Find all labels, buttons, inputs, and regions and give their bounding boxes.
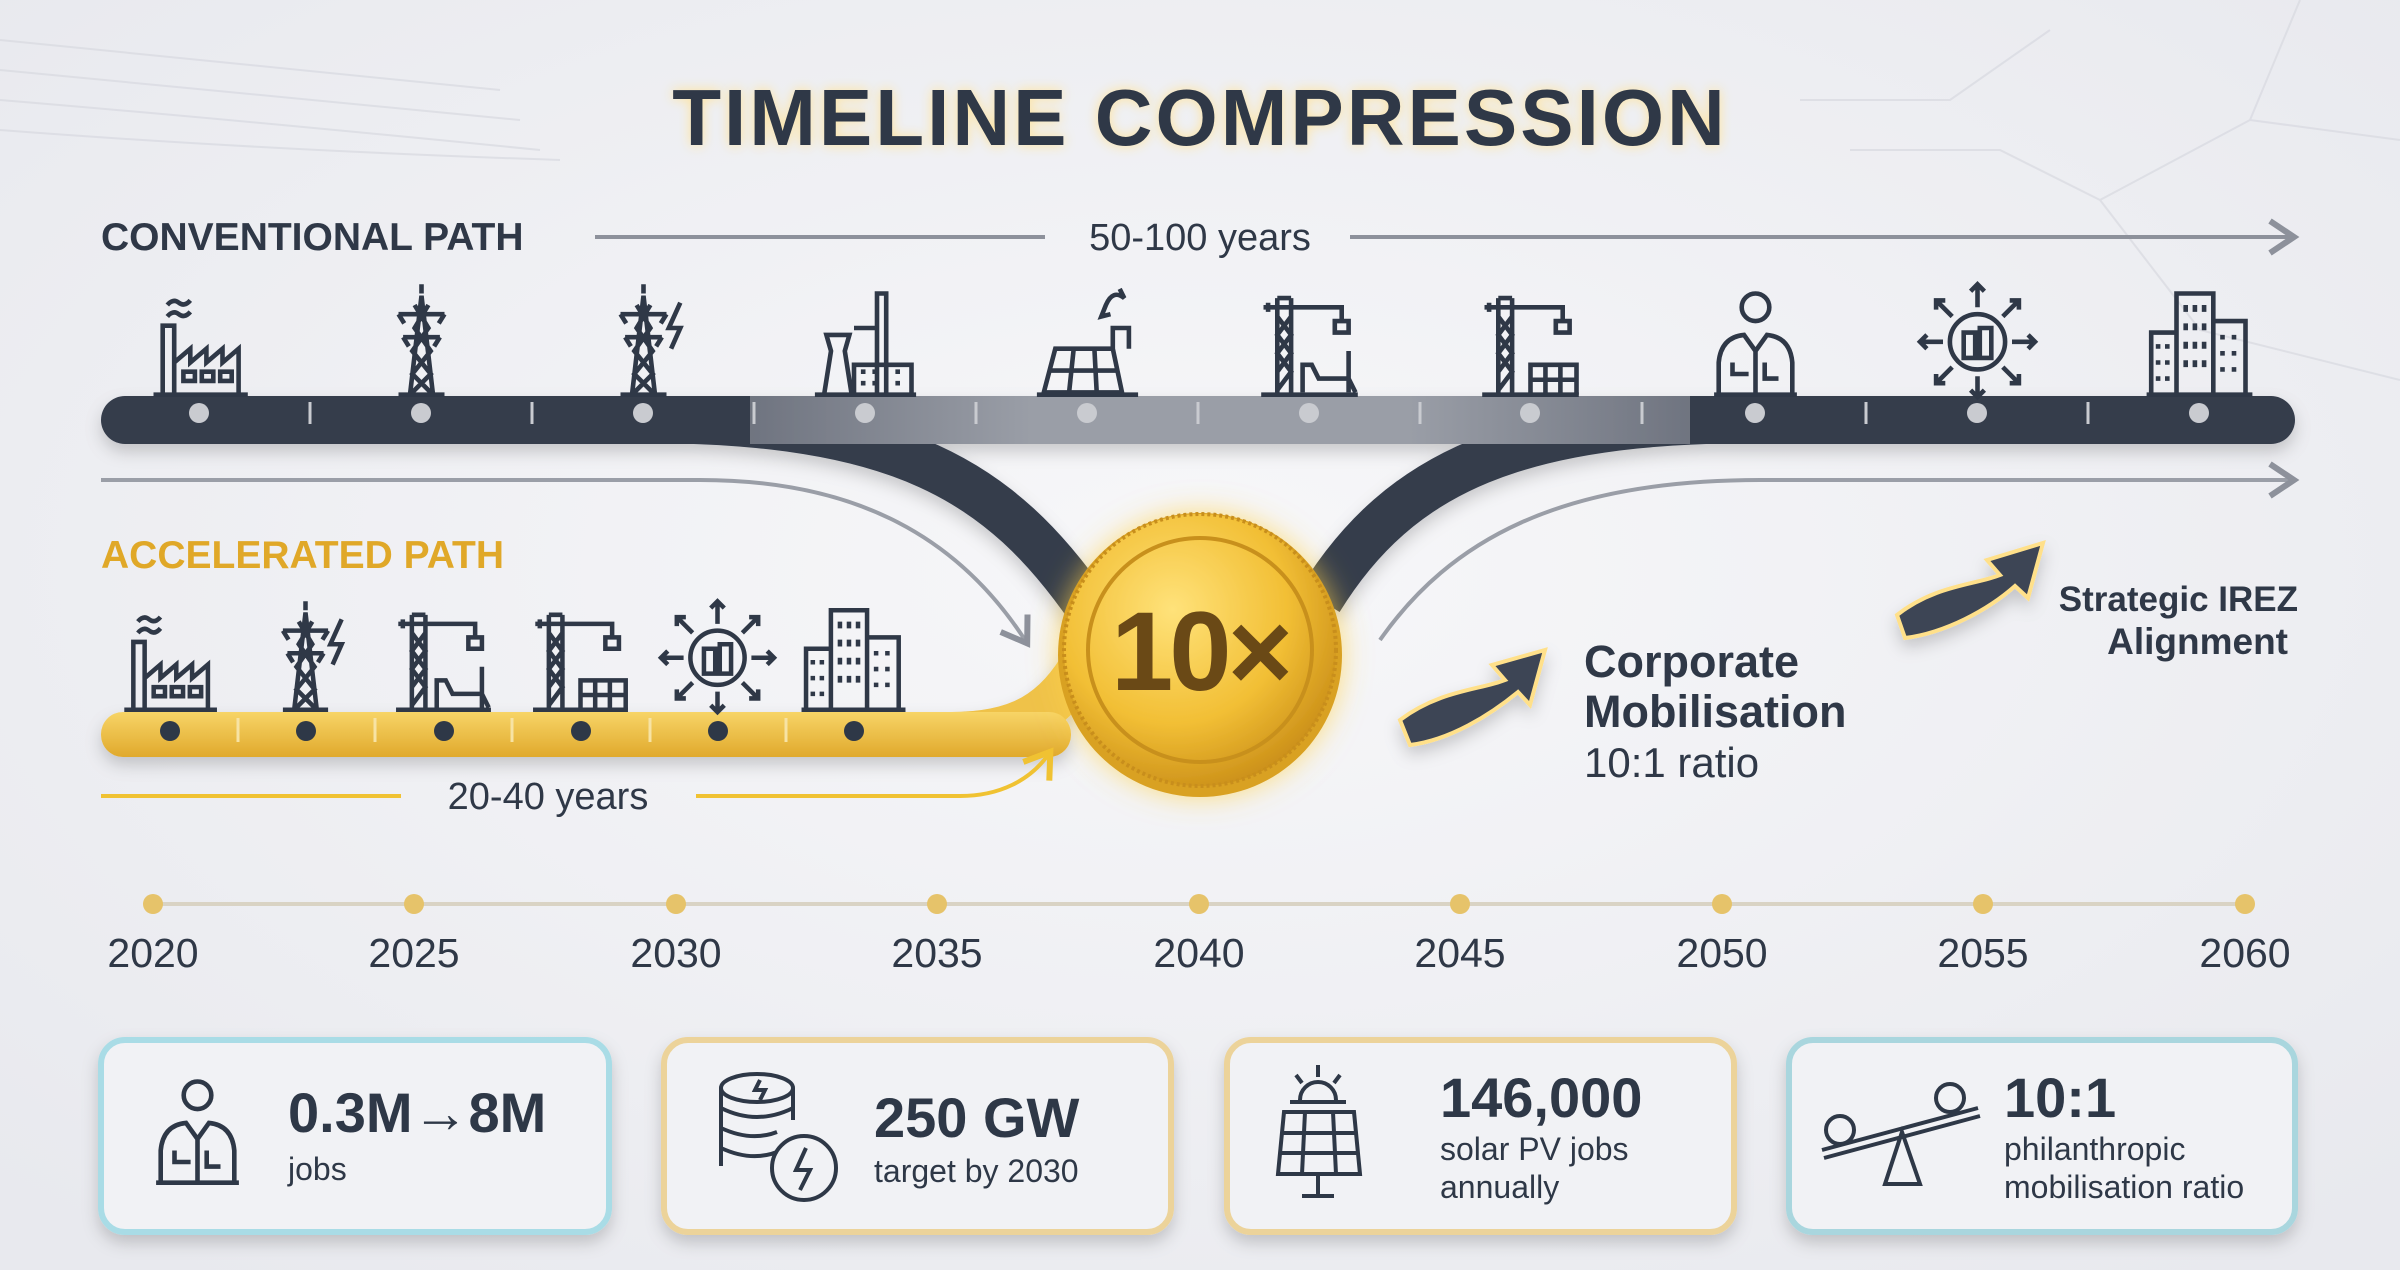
conventional icons <box>154 284 2252 397</box>
accelerated path label: ACCELERATED PATH <box>101 534 504 577</box>
callout: corporate mobilisation <box>1400 636 1846 786</box>
year axis: 2020 <box>107 930 199 976</box>
card: solar PV jobs: 146,000 <box>1440 1066 1642 1129</box>
year axis: 2030 <box>630 930 722 976</box>
coin 10x <box>1058 513 1342 797</box>
card: jobs: 0.3M→8M <box>288 1081 546 1144</box>
accelerated duration arrow: 20-40 years <box>448 776 648 818</box>
year axis: 2060 <box>2199 930 2291 976</box>
year axis: 2045 <box>1414 930 1506 976</box>
card: 10:1 ratio <box>1789 1040 2295 1232</box>
callout: corporate mobilisation: Corporate <box>1584 636 1799 687</box>
year axis: 2025 <box>368 930 460 976</box>
card: 10:1 ratio: philanthropic <box>2004 1131 2185 1167</box>
accelerated icons <box>124 601 905 712</box>
conventional path label: CONVENTIONAL PATH <box>101 216 524 259</box>
year axis <box>107 894 2291 976</box>
accelerated duration arrow <box>101 755 1048 818</box>
year axis: 2035 <box>891 930 983 976</box>
year axis: 2055 <box>1937 930 2029 976</box>
card: solar PV jobs: annually <box>1440 1169 1559 1205</box>
year axis: 2050 <box>1676 930 1768 976</box>
grey flow arrows <box>101 480 2290 640</box>
title: TIMELINE COMPRESSION <box>672 73 1728 162</box>
card: solar PV jobs: solar PV jobs <box>1440 1131 1629 1167</box>
conventional timeline bar <box>101 396 2295 610</box>
card: jobs <box>101 1040 609 1232</box>
callout: strategic IREZ alignment: Strategic IREZ <box>2059 580 2298 619</box>
card: solar PV jobs <box>1227 1040 1734 1232</box>
coin 10x: 10× <box>1111 589 1289 714</box>
year axis: 2040 <box>1153 930 1245 976</box>
callout: strategic IREZ alignment <box>1897 543 2298 662</box>
conventional duration arrow: 50-100 years <box>1089 217 1311 259</box>
card: 10:1 ratio: mobilisation ratio <box>2004 1169 2244 1205</box>
accelerated timeline bar <box>101 660 1085 757</box>
card: 250 GW: 250 GW <box>874 1086 1080 1149</box>
callout: corporate mobilisation: Mobilisation <box>1584 686 1846 737</box>
callout: strategic IREZ alignment: Alignment <box>2107 621 2288 662</box>
card: 250 GW <box>664 1040 1171 1232</box>
card: 10:1 ratio: 10:1 <box>2004 1066 2116 1129</box>
card: jobs: jobs <box>287 1151 347 1187</box>
callout: corporate mobilisation: 10:1 ratio <box>1584 739 1759 786</box>
card: 250 GW: target by 2030 <box>874 1153 1079 1189</box>
